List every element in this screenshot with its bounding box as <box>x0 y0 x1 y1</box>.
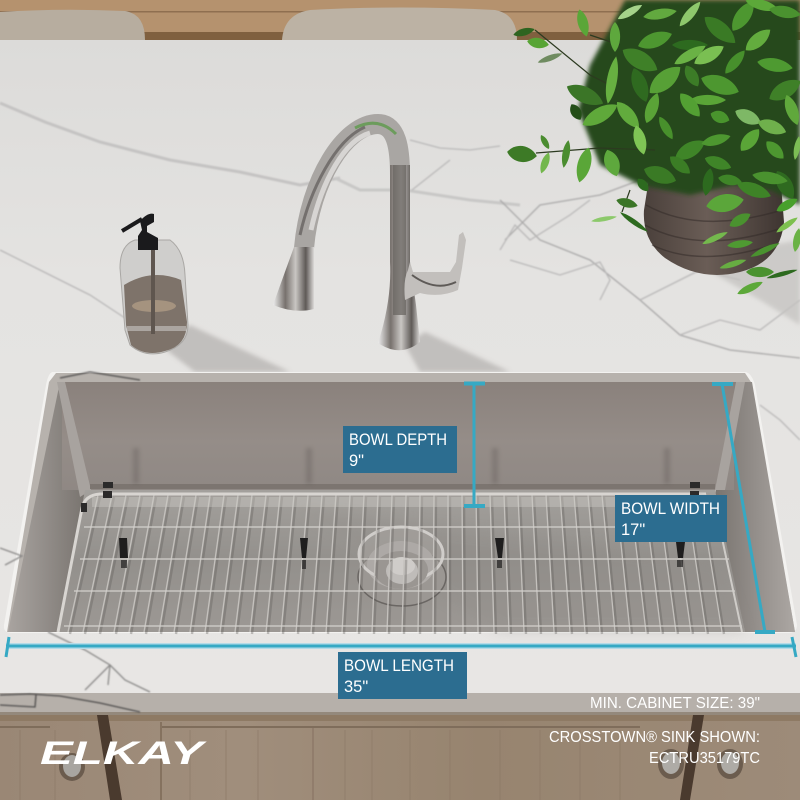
back wall <box>62 382 734 490</box>
plant foliage <box>506 0 800 297</box>
bowl depth caps <box>464 384 485 506</box>
dimension: bowl depth <box>343 384 485 506</box>
bowl width caps <box>712 384 775 632</box>
bowl length line <box>6 643 796 649</box>
bowl length caps <box>6 637 796 657</box>
bowl width label: BOWL WIDTH <box>621 500 720 518</box>
bowl depth label: BOWL DEPTH <box>349 431 447 449</box>
bowl depth label <box>343 426 457 473</box>
cabinet doors <box>0 715 800 800</box>
right wall <box>715 382 795 632</box>
bowl length label: 35" <box>344 678 368 696</box>
marble veins, bottom left <box>0 372 150 712</box>
sink model note <box>549 729 760 767</box>
dimension: bowl length <box>6 637 796 699</box>
left wall <box>8 382 85 632</box>
bowl length label <box>338 652 467 699</box>
background: wooden floor and chairs <box>0 0 800 40</box>
wire bottom grid <box>58 482 742 634</box>
plant pot <box>644 172 784 275</box>
soap dispenser <box>120 214 188 354</box>
drain strainer basket <box>358 527 446 606</box>
sink model note: CROSSTOWN® SINK SHOWN: <box>549 729 760 746</box>
bowl depth label: 9" <box>349 452 364 470</box>
grid clips <box>119 538 685 569</box>
Elkay logo: ELKAY <box>40 735 207 771</box>
bowl depth line <box>472 384 476 505</box>
bowl width label <box>615 495 727 542</box>
sink model note: ECTRU35179TC <box>649 750 760 767</box>
bowl width line <box>722 384 765 632</box>
bowl length label: BOWL LENGTH <box>344 657 454 675</box>
sink basin <box>4 372 797 633</box>
bowl width label: 17" <box>621 521 645 539</box>
faucet <box>273 123 466 350</box>
dimension: bowl width <box>615 384 775 632</box>
cast shadows on counter <box>160 240 800 372</box>
minimum cabinet size note: MIN. CABINET SIZE: 39" <box>590 695 760 712</box>
sink floor <box>58 490 745 632</box>
